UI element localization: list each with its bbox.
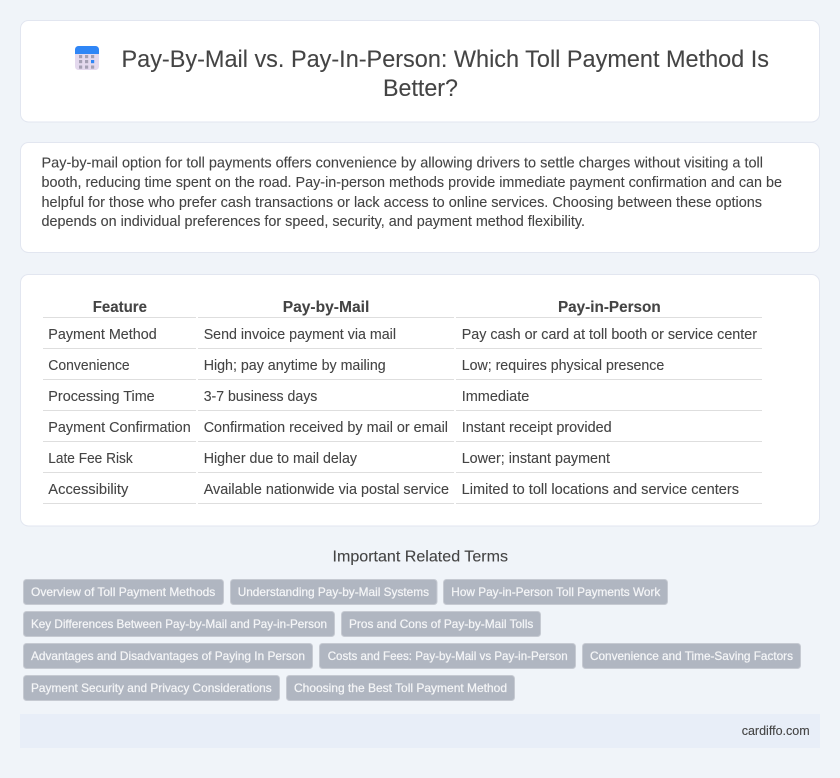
row: payment method: Payment Method — [48, 327, 157, 343]
row: processing time: 3-7 business days — [204, 389, 317, 405]
tag: Payment Security and Privacy Considerations — [31, 681, 272, 695]
tag: Overview of Toll Payment Methods — [31, 585, 215, 599]
tag — [24, 676, 280, 700]
row: processing time: Immediate — [462, 389, 529, 405]
tag: Convenience and Time-Saving Factors — [590, 649, 793, 663]
text block: introduction paragraph: depends on individual preferences for speed, security, and payment method flexibility. — [42, 214, 585, 230]
tag — [230, 580, 437, 604]
text block: introduction paragraph: Pay-by-mail option for toll payments offers convenience by allowing drivers to settle charges without visiting a toll — [42, 156, 763, 172]
tag: Choosing the Best Toll Payment Method — [294, 681, 507, 695]
row: payment confirmation: Instant receipt provided — [462, 420, 612, 436]
icon: calendar — [75, 46, 99, 70]
row: payment method — [48, 327, 757, 343]
tag — [582, 644, 800, 668]
row: payment confirmation: Confirmation received by mail or email — [204, 420, 448, 436]
tag: Pros and Cons of Pay-by-Mail Tolls — [349, 617, 533, 631]
row: payment method: Pay cash or card at toll booth or service center — [462, 327, 757, 343]
row: processing time: Processing Time — [48, 389, 155, 405]
row: accessibility — [48, 482, 739, 498]
title: Better? — [383, 75, 458, 102]
heading: related terms: Important Related Terms — [332, 548, 508, 566]
tag — [342, 612, 540, 636]
row: convenience — [48, 358, 664, 374]
tag — [24, 612, 334, 636]
row: processing time — [48, 389, 529, 405]
row: late fee risk — [48, 451, 610, 467]
row: accessibility: Accessibility — [48, 482, 129, 498]
table header — [93, 299, 661, 316]
title: Pay-By-Mail vs. Pay-In-Person: Which Toll Payment Method Is — [122, 46, 769, 73]
table header: Pay-in-Person — [558, 299, 661, 316]
tag: Key Differences Between Pay-by-Mail and Pay-in-Person — [31, 617, 327, 631]
row: late fee risk: Higher due to mail delay — [204, 451, 358, 467]
tag: Costs and Fees: Pay-by-Mail vs Pay-in-Person — [328, 649, 568, 663]
panel: introduction — [20, 142, 820, 252]
tag — [24, 644, 312, 668]
table header: Pay-by-Mail — [283, 299, 369, 316]
tag: How Pay-in-Person Toll Payments Work — [451, 585, 661, 599]
tag — [320, 644, 576, 668]
row: convenience: Convenience — [48, 358, 130, 374]
panel: comparison table — [20, 274, 820, 526]
row: accessibility: Available nationwide via postal service — [204, 482, 449, 498]
row: payment method: Send invoice payment via mail — [204, 327, 396, 343]
footer: cardiffo.com — [742, 724, 810, 738]
tag: Advantages and Disadvantages of Paying In Person — [31, 649, 305, 663]
row: convenience: High; pay anytime by mailing — [204, 358, 386, 374]
text block: introduction paragraph: booth, reducing time spent on the road. Pay-in-person methods provide immediate payment confirmation and can be — [42, 175, 782, 191]
footer — [20, 714, 820, 748]
panel: title card — [20, 20, 820, 122]
row: late fee risk: Lower; instant payment — [462, 451, 610, 467]
row: late fee risk: Late Fee Risk — [48, 451, 133, 467]
tag — [444, 580, 668, 604]
text block: introduction paragraph — [42, 156, 782, 230]
row: accessibility: Limited to toll locations and service centers — [462, 482, 739, 498]
text block: introduction paragraph: helpful for those who prefer cash transactions or lack access to online services. Choosing between these options — [42, 195, 762, 211]
title — [122, 46, 769, 102]
row: payment confirmation: Payment Confirmation — [48, 420, 191, 436]
tag — [286, 676, 514, 700]
tag — [24, 580, 224, 604]
row: convenience: Low; requires physical presence — [462, 358, 664, 374]
tag: Understanding Pay-by-Mail Systems — [238, 585, 429, 599]
tags: related terms — [24, 580, 800, 700]
row: payment confirmation — [48, 420, 612, 436]
table header: Feature — [93, 299, 147, 316]
